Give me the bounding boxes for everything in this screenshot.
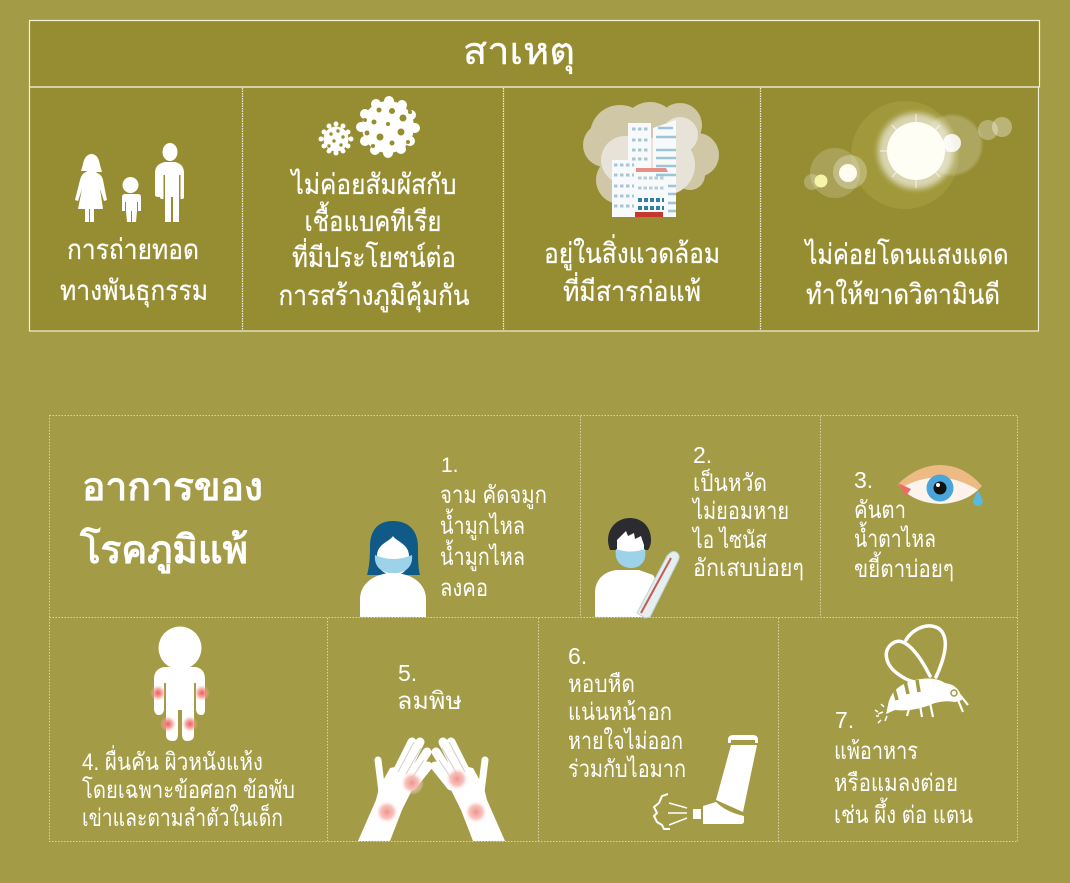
text: cause 3: อยู่ในสิ่งแวดล้อม bbox=[544, 234, 720, 271]
text: cause 2: การสร้างภูมิคุ้มกัน bbox=[278, 280, 470, 313]
symptom 4 bbox=[82, 626, 295, 832]
text: symptom 3 bbox=[854, 467, 954, 583]
text: symptom 6: หายใจไม่ออก bbox=[568, 727, 683, 755]
text: symptom 7: เช่น ผึ้ง ต่อ แตน bbox=[834, 797, 973, 829]
text: cause 2: ที่มีประโยชน์ต่อ bbox=[292, 238, 456, 273]
text: symptom 1: น้ำมูกไหล bbox=[440, 508, 525, 541]
text: symptom 6: ร่วมกับไอมาก bbox=[568, 755, 686, 783]
text: cause 3: ที่มีสารก่อแพ้ bbox=[563, 272, 701, 307]
text: symptom 3: ขยี้ตาบ่อยๆ bbox=[854, 551, 954, 583]
symptom 6 bbox=[568, 643, 758, 829]
icon: sun with lens flare bbox=[804, 101, 1012, 209]
text: symptom 7 bbox=[834, 707, 973, 829]
text: symptom 7: แพ้อาหาร bbox=[834, 738, 918, 765]
panel: symptoms bbox=[50, 416, 1018, 842]
text: symptom 3: 3. bbox=[854, 467, 873, 493]
text: cause 4 bbox=[804, 238, 1008, 310]
text: symptom 5: ลมพิษ bbox=[397, 688, 462, 715]
panel: causes bbox=[30, 20, 1040, 332]
text: symptom 7: 7. bbox=[835, 707, 854, 733]
text: symptom 6 bbox=[568, 643, 686, 783]
icon: irritated eye bbox=[898, 465, 983, 506]
text: symptom 1: จาม คัดจมูก bbox=[440, 482, 547, 510]
text: symptom 6: หอบหืด bbox=[568, 671, 635, 698]
text: symptom 5: 5. bbox=[398, 660, 417, 686]
text: symptom 3: คันตา bbox=[854, 497, 906, 524]
heading: symptoms: โรคภูมิแพ้ bbox=[79, 527, 248, 574]
icon: child body with rashes bbox=[150, 626, 210, 741]
text: symptom 7: หรือแมลงต่อย bbox=[834, 770, 958, 797]
symptom 7 bbox=[834, 626, 973, 829]
text: symptom 2: ไม่ยอมหาย bbox=[691, 497, 789, 525]
icon: family bbox=[75, 143, 184, 222]
icon: boy with thermometer bbox=[595, 518, 679, 618]
text: cause 2: เชื้อแบคทีเรีย bbox=[304, 201, 442, 237]
icon: asthma inhaler bbox=[654, 735, 758, 829]
text: symptom 6: แน่นหน้าอก bbox=[568, 699, 672, 726]
symptom 1 bbox=[360, 454, 547, 617]
text: cause 1 bbox=[60, 234, 208, 308]
text: symptom 6: 6. bbox=[568, 643, 587, 669]
text: symptom 4 bbox=[82, 745, 295, 832]
heading: causes: สาเหตุ bbox=[463, 31, 575, 74]
text: symptom 1: น้ำมูกไหล bbox=[440, 539, 525, 572]
text: cause 2: ไม่ค่อยสัมผัสกับ bbox=[290, 169, 456, 200]
text: cause 4: ไม่ค่อยโดนแสงแดด bbox=[804, 238, 1008, 270]
text: cause 1: การถ่ายทอด bbox=[67, 234, 199, 265]
symptom 2 bbox=[595, 442, 804, 618]
text: symptom 1: 1. bbox=[441, 454, 459, 477]
text: symptom 4: โดยเฉพาะข้อศอก ข้อพับ bbox=[82, 776, 295, 804]
heading: symptoms: อาการของ bbox=[82, 466, 263, 509]
text: symptom 2 bbox=[691, 442, 804, 582]
heading: symptoms bbox=[79, 466, 263, 574]
text: symptom 1: ลงคอ bbox=[440, 575, 488, 602]
icon: polluted city bbox=[583, 102, 719, 217]
icon: woman with mask bbox=[360, 521, 426, 617]
text: cause 2 bbox=[278, 169, 470, 313]
icon: bee bbox=[875, 626, 968, 723]
text: symptom 4: เข่าและตามลำตัวในเด็ก bbox=[82, 803, 283, 832]
text: cause 3 bbox=[544, 234, 720, 307]
text: symptom 4: 4. ผื่นคัน ผิวหนังแห้ง bbox=[82, 745, 263, 776]
text: symptom 3: น้ำตาไหล bbox=[854, 521, 936, 553]
icon: bacteria bbox=[318, 96, 420, 158]
icon: hands with hives bbox=[358, 742, 505, 841]
text: symptom 2: 2. bbox=[693, 442, 712, 468]
symptom 5 bbox=[358, 660, 505, 841]
text: symptom 2: อักเสบบ่อยๆ bbox=[693, 555, 804, 582]
text: cause 1: ทางพันธุกรรม bbox=[60, 275, 208, 308]
symptom 3 bbox=[854, 465, 983, 583]
text: symptom 5 bbox=[397, 660, 462, 715]
text: symptom 1 bbox=[440, 454, 547, 602]
text: cause 4: ทำให้ขาดวิตามินดี bbox=[806, 278, 1000, 310]
text: symptom 2: เป็นหวัด bbox=[693, 468, 767, 497]
text: symptom 2: ไอ ไซนัส bbox=[691, 526, 767, 554]
